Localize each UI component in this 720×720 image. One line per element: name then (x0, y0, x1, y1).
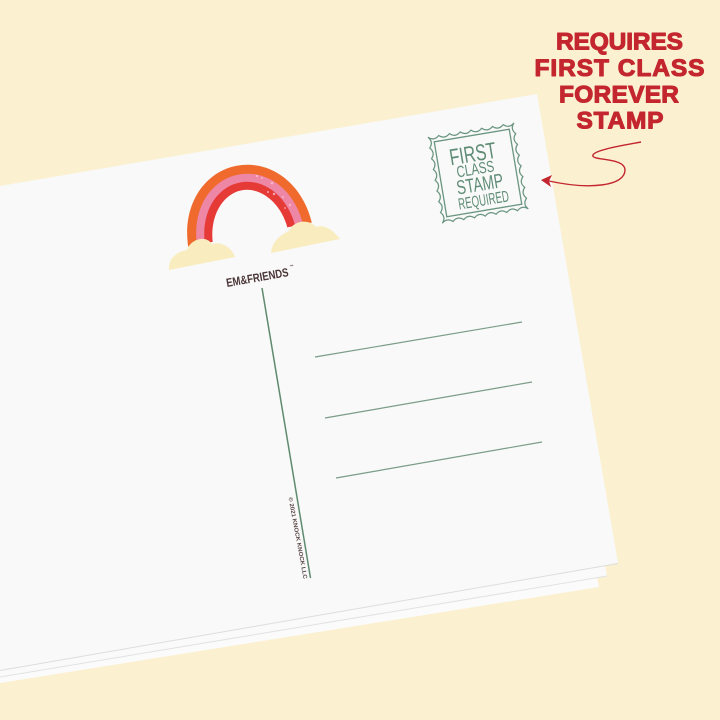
stamp text: CLASS (455, 158, 496, 181)
stamp text: REQUIRED (457, 188, 510, 214)
stamp text: STAMP (455, 170, 505, 200)
stamp inner frame (434, 129, 522, 217)
icon: left cloud (169, 239, 235, 270)
postcard stack (0, 94, 618, 683)
heading: FIRST CLASS (534, 55, 704, 82)
vertical divider (262, 288, 310, 578)
heading: REQUIRES (556, 28, 683, 56)
address lines (315, 322, 542, 478)
stamp scalloped border (428, 123, 528, 223)
middle sheet (0, 565, 607, 677)
heading (534, 28, 704, 134)
heading: STAMP (576, 108, 664, 134)
brand logo: ™ (289, 263, 294, 269)
icon: rainbow (169, 154, 340, 270)
rainbow speckles (256, 175, 291, 209)
arrow (541, 142, 641, 187)
bottom sheet (0, 577, 599, 683)
stamp text: FIRST (447, 137, 498, 170)
stamp text (447, 136, 510, 214)
icon: right cloud (271, 222, 340, 253)
postage stamp box (428, 123, 528, 223)
top sheet (0, 94, 618, 670)
brand logo: EM&FRIENDS (225, 265, 290, 290)
heading: FOREVER (559, 82, 679, 108)
copyright text: © 2021 KNOCK KNOCK LLC (287, 497, 309, 580)
